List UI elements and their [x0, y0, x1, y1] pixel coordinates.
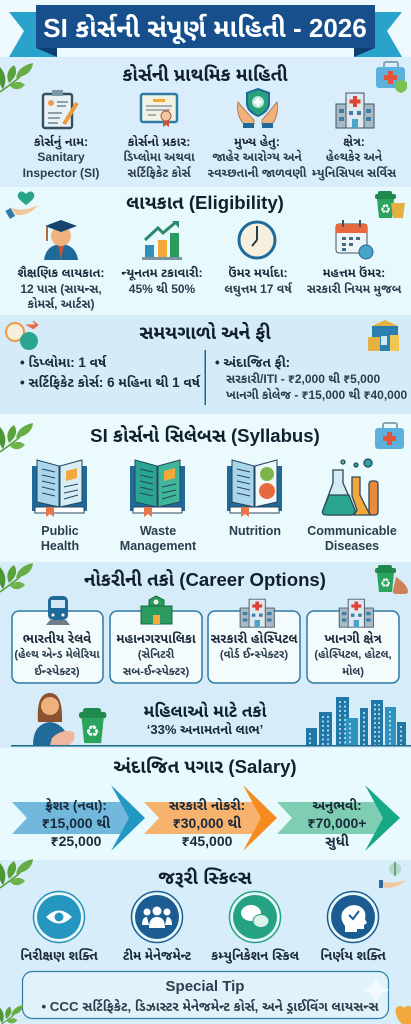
label	[120, 524, 197, 553]
icon: leaf	[0, 63, 33, 92]
card: private sector: (હોસ્પિટલ, હોટલ,	[314, 647, 392, 661]
icon: book with fruit	[227, 460, 282, 517]
arrow: fresher: ફ્રેશર (નવા):	[45, 797, 107, 813]
text: મહિલાઓ માટે તકો	[144, 701, 266, 721]
panel: eligibility	[5, 191, 405, 311]
arrow: experienced: ₹70,000+	[308, 815, 366, 831]
heading: નોકરીની તકો (Career Options)	[84, 569, 326, 590]
list: fee	[215, 355, 408, 402]
callout: women opportunities	[11, 693, 411, 746]
icon: orange hands	[396, 1006, 411, 1024]
text block: max age: મહત્તમ ઉંમર:	[323, 265, 385, 280]
icon: woman	[33, 693, 74, 745]
icon: head with check	[328, 892, 378, 942]
label: Communicable	[307, 524, 397, 538]
panel: syllabus	[0, 423, 404, 553]
divider	[204, 350, 206, 405]
text block: max age: સરકારી નિયમ મુજબ	[307, 282, 402, 297]
icon: municipal building	[141, 596, 172, 624]
card: private sector: ખાનગી ક્ષેત્ર	[324, 630, 382, 646]
text block: course name: Sanitary	[37, 150, 85, 164]
card: railway: ઈન્સ્પેક્ટર)	[34, 664, 80, 678]
icon: hands and shield	[238, 89, 277, 128]
arrow: government job	[144, 785, 277, 851]
arrow: fresher	[12, 785, 145, 851]
icon: hospital	[339, 599, 373, 627]
text block: course type: કોર્સનો પ્રકાર:	[128, 134, 190, 149]
icon: book	[130, 460, 185, 517]
text block: course name: કોર્સનું નામ:	[34, 134, 88, 150]
label: Public	[41, 524, 79, 538]
icon: train	[46, 596, 70, 625]
text block: age limit: ઉંમર મર્યાદા:	[228, 265, 288, 280]
text block: minimum percent: ન્યૂનતમ ટકાવારી:	[121, 265, 203, 281]
icon: certificate	[141, 94, 177, 127]
card: government hospital	[208, 611, 300, 683]
callout: special tip: Special Tip	[166, 978, 244, 995]
text block: sector: હેલ્થકેર અને	[326, 150, 383, 164]
text block: education: શૈક્ષણિક લાયકાત:	[17, 265, 105, 280]
list: duration: • ડિપ્લોમા: 1 વર્ષ	[20, 355, 107, 370]
panel: career options	[0, 563, 411, 1024]
card: railway: ભારતીય રેલવે	[23, 630, 91, 646]
text block: minimum percent	[121, 265, 203, 296]
arrow: experienced	[277, 785, 400, 851]
text block: age limit: લઘુત્તમ 17 વર્ષ	[224, 282, 293, 297]
heading: SI કોર્સનો સિલેબસ (Syllabus)	[90, 425, 320, 446]
list: fee: • અંદાજિત ફી:	[215, 355, 290, 370]
arrow: government job: ₹30,000 થી	[173, 815, 242, 831]
icon: recycle bin	[375, 191, 405, 218]
card: railway	[12, 611, 103, 683]
icon: leaf	[0, 859, 33, 888]
callout: special tip: • CCC સર્ટિફિકેટ, ડિઝાસ્ટર મેનેજમેન્ટ કોર્સ, અને ડ્રાઈવિંગ લાયસન્સ	[41, 998, 379, 1015]
heading: જરૂરી સ્કિલ્સ	[158, 867, 253, 888]
list: duration	[20, 355, 201, 390]
label: Nutrition	[229, 524, 281, 538]
icon: calendar	[336, 220, 373, 259]
text block: max age	[307, 265, 402, 297]
icon: plant in hand	[379, 862, 406, 888]
icon: recycle bin	[79, 708, 106, 743]
text block: main purpose	[208, 133, 307, 180]
icon: leaf	[0, 423, 33, 452]
icon: book	[32, 460, 87, 517]
text block: education: કોમર્સ, આર્ટસ)	[27, 297, 95, 311]
card: municipal: મહાનગરપાલિકા	[116, 631, 196, 646]
text block: main purpose: સ્વચ્છતાની જાળવણી	[208, 166, 307, 180]
card: municipal: સબ-ઈન્સ્પેક્ટર)	[123, 664, 189, 678]
icon: first aid kit	[375, 423, 404, 449]
label: નિર્ણય શક્તિ	[320, 948, 386, 963]
panel: salary	[12, 756, 400, 851]
arrow: experienced: સુધી	[325, 833, 350, 850]
text: ‘33% અનામતનો લાભ’	[147, 722, 263, 737]
arrow: government job: સરકારી નોકરી:	[169, 797, 245, 813]
label: Health	[41, 539, 79, 553]
label: કમ્યુનિકેશન સ્કિલ	[211, 947, 300, 964]
list: fee: ખાનગી કોલેજ - ₹15,000 થી ₹40,000	[226, 388, 408, 402]
text block: education	[17, 265, 105, 311]
arrow: fresher: ₹15,000 થી	[42, 815, 111, 831]
icon: team	[132, 892, 182, 942]
text block: education: 12 પાસ (સાયન્સ,	[20, 282, 102, 296]
icon: leaf	[0, 563, 33, 592]
list: fee: સરકારી/ITI - ₹2,000 થી ₹5,000	[226, 372, 381, 386]
text block: course name: Inspector (SI)	[23, 166, 99, 180]
heading: અંદાજિત પગાર (Salary)	[113, 756, 297, 777]
card: private sector	[307, 611, 399, 683]
icon: city skyline	[306, 697, 406, 745]
label: Waste	[140, 524, 176, 538]
text block: sector: મ્યુનિસિપલ સર્વિસ	[312, 166, 397, 181]
label: Diseases	[325, 539, 379, 553]
label: Management	[120, 539, 197, 553]
baseline	[11, 745, 411, 746]
callout: special tip	[22, 972, 390, 1018]
card: railway: (હેલ્થ એન્ડ મેલેરિયા	[14, 647, 100, 661]
icon: chat	[230, 892, 280, 942]
icon: hospital	[240, 599, 274, 627]
arrow: government job: ₹45,000	[182, 833, 233, 849]
icon: graduate	[44, 220, 78, 260]
text block: minimum percent: 45% થી 50%	[129, 282, 196, 296]
text block: sector	[312, 133, 397, 181]
icon: hospital	[336, 93, 374, 128]
card: government hospital: સરકારી હોસ્પિટલ	[210, 631, 298, 646]
label	[41, 524, 79, 553]
label: નિરીક્ષણ શક્તિ	[20, 948, 98, 963]
icon: bin and bag	[375, 565, 408, 594]
text block: course name	[23, 134, 99, 180]
icon: eye	[34, 892, 84, 942]
icon: first aid kit	[376, 62, 407, 93]
icon: clock	[239, 222, 275, 258]
text block: sector: ક્ષેત્ર:	[343, 133, 365, 149]
title banner: SI કોર્સની સંપૂર્ણ માહિતી - 2026	[43, 13, 367, 44]
icon: heart in hand	[5, 192, 38, 219]
icon: flasks	[322, 459, 378, 515]
text block: main purpose: મુખ્ય હેતુ:	[234, 133, 280, 150]
panel: duration and fee	[6, 320, 408, 405]
arrow: experienced: અનુભવી:	[312, 798, 362, 814]
heading: સમયગાળો અને ફી	[139, 322, 271, 343]
icon: college building	[368, 320, 399, 351]
card: municipal	[110, 611, 202, 683]
text block: course type: ડિપ્લોમા અથવા	[123, 150, 195, 164]
list: duration: • સર્ટિફિકેટ કોર્સ: 6 મહિના થી 1 વર્ષ	[20, 374, 201, 390]
icon: clock and arrow	[6, 321, 38, 350]
panel: basic information	[0, 62, 407, 181]
card: government hospital: (વોર્ડ ઈન્સ્પેક્ટર)	[220, 647, 288, 661]
label	[307, 524, 397, 553]
icon: bar chart	[142, 221, 182, 260]
icon: leaf	[0, 1005, 23, 1024]
label: ટીમ મેનેજમેન્ટ	[123, 947, 192, 963]
card: municipal: (સેનિટરી	[138, 647, 175, 661]
panel: skills	[0, 859, 411, 1024]
text block: course type: સર્ટિફિકેટ કોર્સ	[127, 166, 192, 180]
text block: course type	[123, 134, 195, 180]
heading: લાયકાત (Eligibility)	[126, 192, 284, 213]
heading: કોર્સની પ્રાથમિક માહિતી	[122, 64, 288, 85]
icon: clipboard	[43, 90, 77, 128]
text block: main purpose: જાહેર આરોગ્ય અને	[212, 150, 302, 164]
card: private sector: મોલ)	[342, 665, 364, 678]
arrow: fresher: ₹25,000	[51, 833, 102, 849]
title banner	[9, 5, 402, 57]
text block: age limit	[224, 265, 293, 297]
